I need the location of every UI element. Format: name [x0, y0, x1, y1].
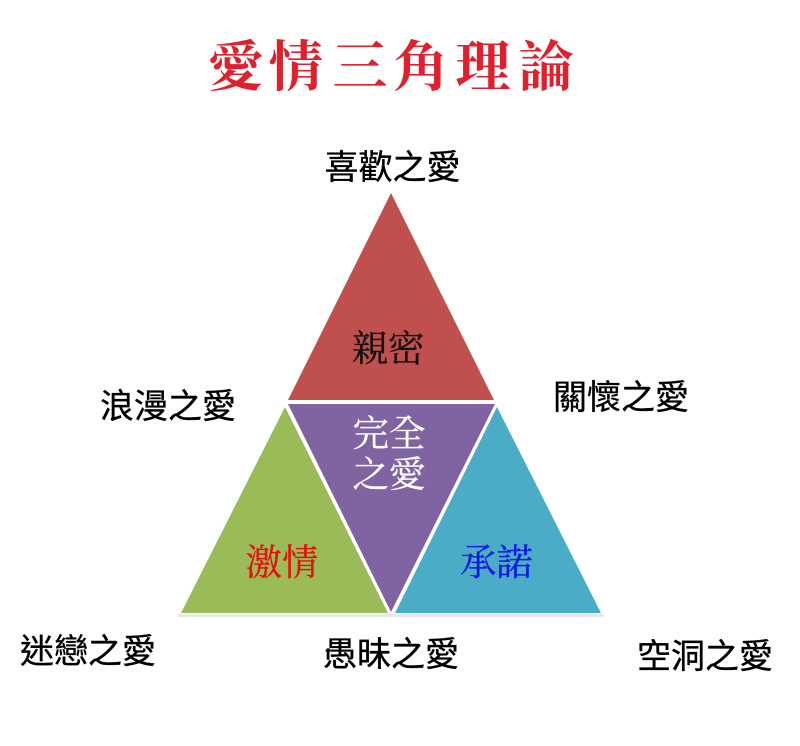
title: 角 [394, 37, 449, 98]
triangle: commitment [395, 407, 601, 613]
triangle: passion [181, 407, 388, 613]
label: fatuous love: 愚昧之愛 [323, 636, 459, 674]
title: 愛 [208, 37, 264, 98]
label: infatuation: 迷戀之愛 [20, 633, 156, 671]
label: passion: 激情 [246, 542, 318, 583]
triangle: intimacy [288, 193, 494, 400]
label: romantic love: 浪漫之愛 [100, 388, 236, 426]
triangle: complete love [288, 404, 495, 612]
label: companionate love: 關懷之愛 [553, 379, 689, 417]
label: liking: 喜歡之愛 [324, 149, 460, 187]
title [208, 37, 574, 98]
label: complete love [352, 413, 426, 495]
title: 論 [518, 37, 574, 98]
label: complete love: 完全 [352, 413, 426, 454]
title: 理 [456, 37, 511, 98]
title: 三 [332, 37, 388, 98]
label: empty love: 空洞之愛 [637, 638, 773, 676]
label: commitment: 承諾 [460, 542, 533, 583]
title: 情 [268, 37, 324, 98]
label: intimacy: 親密 [352, 328, 425, 369]
label: complete love: 之愛 [352, 454, 426, 495]
